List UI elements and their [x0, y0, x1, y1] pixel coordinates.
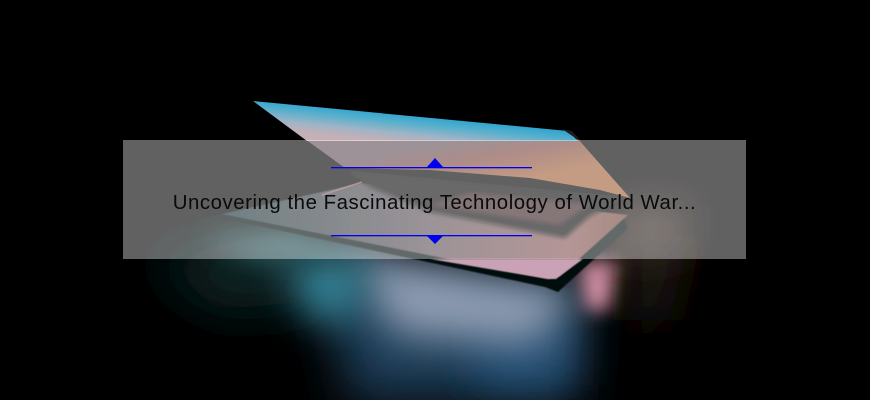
title text: Uncovering the Fascinating Technology of World War...	[173, 192, 696, 214]
laptop base	[222, 170, 628, 292]
translucent title panel	[123, 140, 746, 259]
top divider with up arrow	[331, 158, 532, 168]
bottom divider with down arrow	[331, 235, 532, 244]
keyboard	[345, 170, 628, 238]
palm rest below the panel	[430, 259, 583, 279]
laptop screen	[253, 101, 630, 198]
table reflection glow	[150, 205, 690, 400]
